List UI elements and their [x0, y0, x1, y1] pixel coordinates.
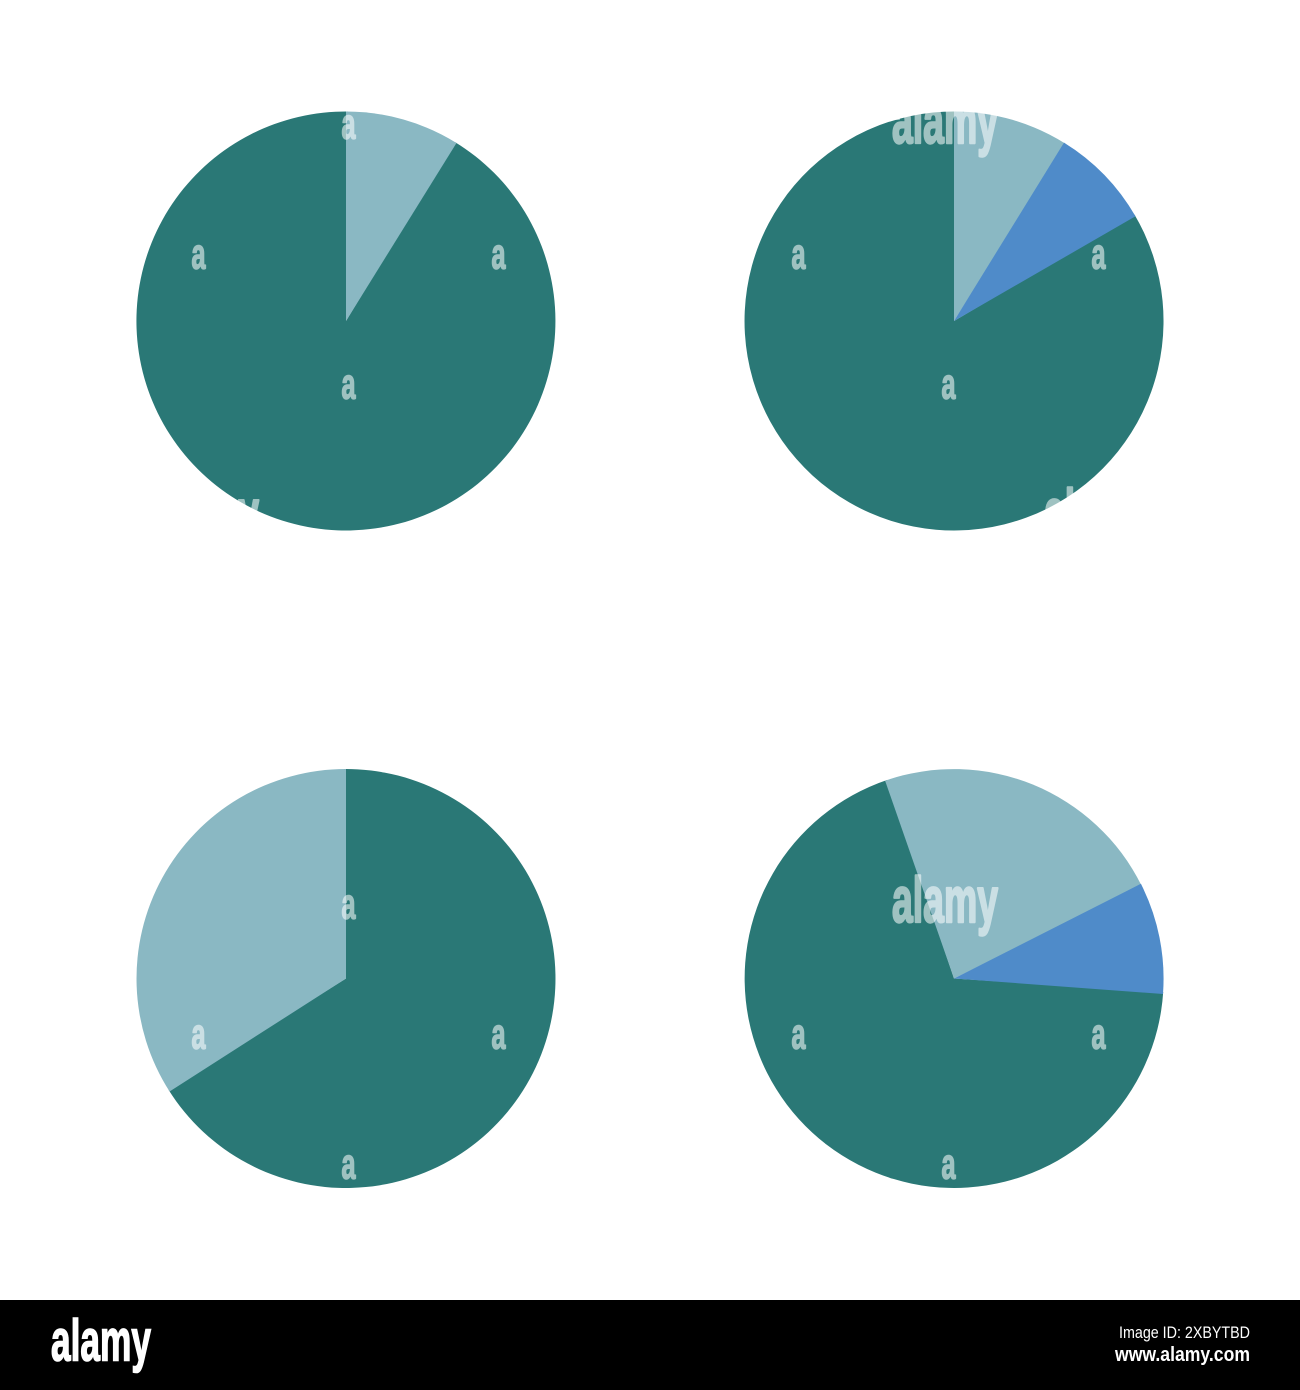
watermark letters: a	[492, 230, 506, 278]
pie chart: top left	[136, 111, 555, 530]
watermark letters: a	[342, 360, 356, 408]
slice: blue segment	[954, 143, 1136, 321]
watermark letters: a	[1092, 230, 1106, 278]
watermark logos: alamy	[1044, 476, 1150, 548]
watermark letters: a	[942, 1140, 956, 1188]
watermark letters: a	[1092, 1010, 1106, 1058]
pie chart: bottom right	[745, 769, 1164, 1188]
watermark letters: a	[792, 230, 806, 278]
slice: light segment	[137, 769, 346, 1092]
watermark letters: a	[492, 1010, 506, 1058]
footer logo: alamy	[51, 1308, 151, 1374]
watermark letters: a	[342, 1140, 356, 1188]
watermark logos: alamy	[892, 85, 998, 157]
watermark letters: a	[192, 1010, 206, 1058]
watermark letters	[192, 100, 1106, 1188]
watermark logos: alamy	[892, 864, 998, 936]
footer bar	[0, 1300, 1300, 1390]
watermark letters: a	[942, 360, 956, 408]
watermark letters: a	[792, 1010, 806, 1058]
pie chart: top right	[745, 111, 1164, 530]
website: www.alamy.com	[1114, 1344, 1250, 1366]
pie chart: bottom left	[137, 769, 555, 1188]
slice: light segment	[954, 112, 1066, 321]
watermark logos	[153, 85, 1150, 936]
slice: light segment	[346, 112, 456, 321]
watermark letters: a	[342, 880, 356, 928]
image id: Image ID: 2XBYTBD	[1119, 1323, 1250, 1342]
slice: light segment	[885, 769, 1142, 978]
watermark logos: alamy	[153, 476, 259, 548]
slice: blue segment	[954, 884, 1164, 994]
watermark letters: a	[342, 100, 356, 148]
watermark letters: a	[192, 230, 206, 278]
